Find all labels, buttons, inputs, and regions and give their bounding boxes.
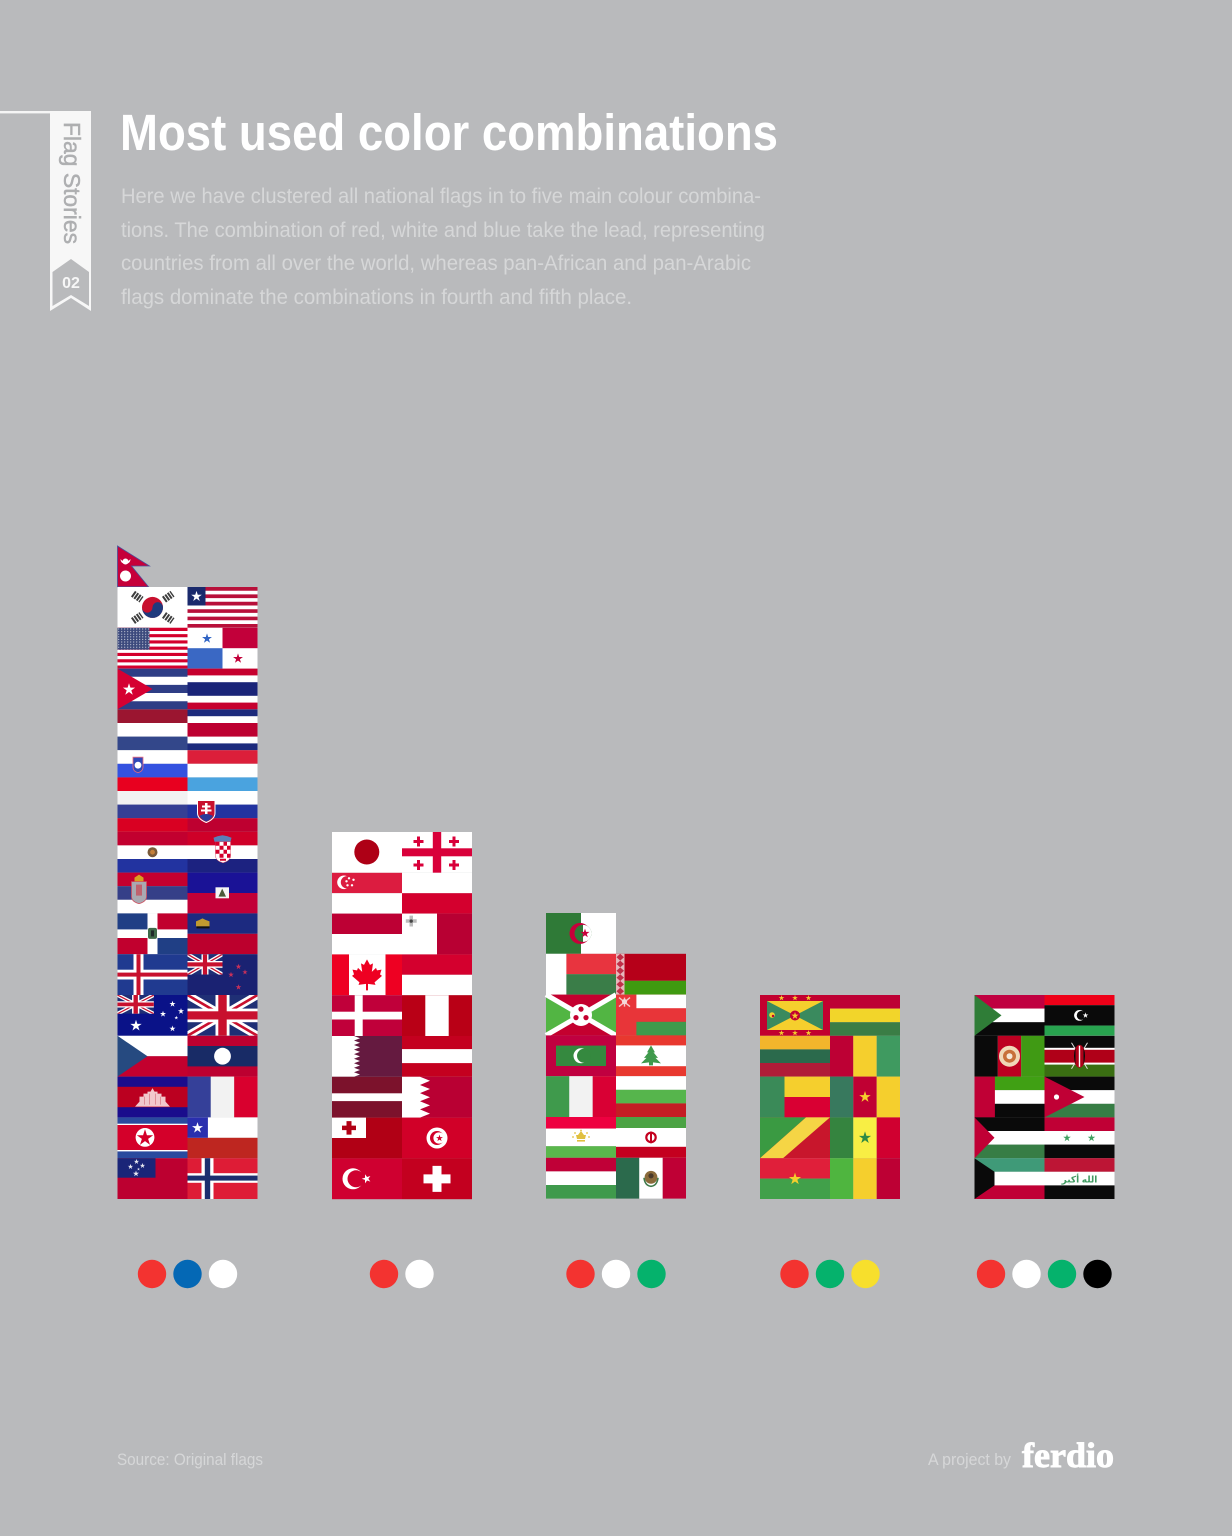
flag: Panama [188,628,258,669]
flag: Denmark [332,995,402,1036]
flag: Norway [188,1158,258,1199]
flag: Iceland [118,954,188,995]
flag: Senegal [830,1117,900,1158]
colour dots: red, green, yellow [780,1260,880,1288]
flag: Palestine [974,1117,1044,1158]
intro paragraph: Here we have clustered all national flags in to five main colour combina- [121,184,761,208]
flag: New Zealand [188,954,258,995]
flag: Serbia [118,873,188,913]
flag: Cambodia [118,1077,188,1117]
flag: Malta [402,914,472,954]
flag: Burkina Faso [760,1158,830,1199]
intro paragraph [121,184,765,309]
flag: Cameroon [830,1077,900,1117]
flag: Algeria [546,913,616,954]
flag: Sudan [974,995,1044,1036]
flag: Slovenia [118,750,188,791]
colour dots: red, white, green [566,1260,666,1288]
flag: Jordan [1044,1077,1114,1117]
flag: Iraq [1044,1158,1114,1199]
flag: Lebanon [616,1035,686,1076]
flag: Switzerland [402,1158,472,1199]
flag: Syria [1044,1117,1114,1158]
flag: Mexico [616,1158,686,1199]
flag: Oman [616,995,686,1035]
colour dots: red, white, green, black [977,1260,1112,1288]
flag: Liechtenstein [188,913,258,954]
credit line: A project by [928,1451,1012,1469]
flag: Kuwait [974,1158,1044,1199]
flag: United States [118,628,188,669]
flag: Latvia [332,1077,402,1118]
flag: Cuba [118,669,188,709]
ribbon: Flag Stories 02: 02 [62,275,80,292]
flag: Thailand [188,669,258,709]
flag: Russia [118,791,188,832]
flag: Paraguay [118,832,188,873]
flag: Tunisia [402,1118,472,1158]
intro paragraph: tions. The combination of red, white and blue take the lead, representing [121,218,765,242]
flag: Italy [546,1076,616,1117]
flag: Samoa [118,1158,188,1199]
flag: Lithuania [760,1036,830,1077]
flag: Singapore [332,873,402,914]
colour dots: red, blue, white [138,1260,237,1288]
stacked flag column: red, white [332,832,472,1199]
flag: Mali [830,1158,900,1199]
flag: United Kingdom [188,995,258,1036]
flag: Burundi [546,995,616,1035]
flag: Netherlands [118,709,188,750]
flag: Poland [402,873,472,914]
ferdio logo wordmark: ferdio [1022,1436,1114,1475]
flag: Peru [402,995,472,1036]
flag: Guinea [830,1036,900,1077]
flag: Bulgaria [616,1076,686,1117]
title: Most used color combinations [120,104,778,161]
source note: Source: Original flags [117,1451,263,1469]
flag: Canada [332,954,402,995]
flag: Iran [616,1117,686,1158]
flag: Congo [760,1117,830,1158]
flag: Georgia [402,832,472,873]
flag: Hungary [546,1158,616,1199]
flag: Indonesia [332,914,402,954]
stacked flag column: red, white, green, black [974,995,1114,1199]
stacked flag column: red, white, green [546,913,686,1199]
stacked flag column: red, green, yellow [760,995,900,1199]
flag: Bahrain [402,1077,472,1118]
flag: Maldives [546,1035,616,1076]
flag: Libya [1044,995,1114,1036]
intro paragraph: flags dominate the combinations in fourth and fifth place. [121,285,632,309]
flag: Croatia [188,832,258,873]
flag: Austria [402,1036,472,1077]
flag: Iraq: الله أكبر [1061,1174,1097,1186]
flag: Laos [188,1036,258,1077]
flag: Benin [760,1077,830,1117]
flag: South Korea [118,587,188,628]
intro paragraph: countries from all over the world, whereas pan-African and pan-Arabic [121,251,751,275]
colour dots: red, white [370,1260,434,1288]
flag: Belarus [616,954,686,995]
flag: Japan [332,832,402,873]
flag: Chile [188,1117,258,1158]
flag: Czech Republic [118,1036,188,1077]
flag: Kenya [1044,1036,1114,1077]
flag: Monaco [402,954,472,995]
flag: Nepal [118,546,150,587]
flag: Bolivia [830,995,900,1036]
stacked flag column: red, blue, white [118,546,258,1199]
flag: North Korea [118,1117,188,1158]
flag: Turkey [332,1158,402,1199]
flag: Costa Rica [188,709,258,750]
flag: Haiti [188,873,258,913]
flag: UAE [974,1077,1044,1117]
flag: Madagascar [546,954,616,995]
ribbon: Flag Stories 02: Flag Stories [59,122,85,244]
flag: Liberia [188,587,258,628]
flag: Afghanistan [974,1036,1044,1077]
flag: Australia [118,995,188,1036]
flag: Tonga [332,1118,402,1158]
flag: Luxembourg [188,750,258,791]
flag: Dominican Republic [118,913,188,954]
flag: Qatar [332,1036,402,1077]
ribbon: Flag Stories 02 [0,111,91,311]
flag: France [188,1077,258,1117]
flag: Tajikistan [546,1117,616,1158]
flag: Slovakia [188,791,258,832]
flag: Grenada [760,995,830,1036]
